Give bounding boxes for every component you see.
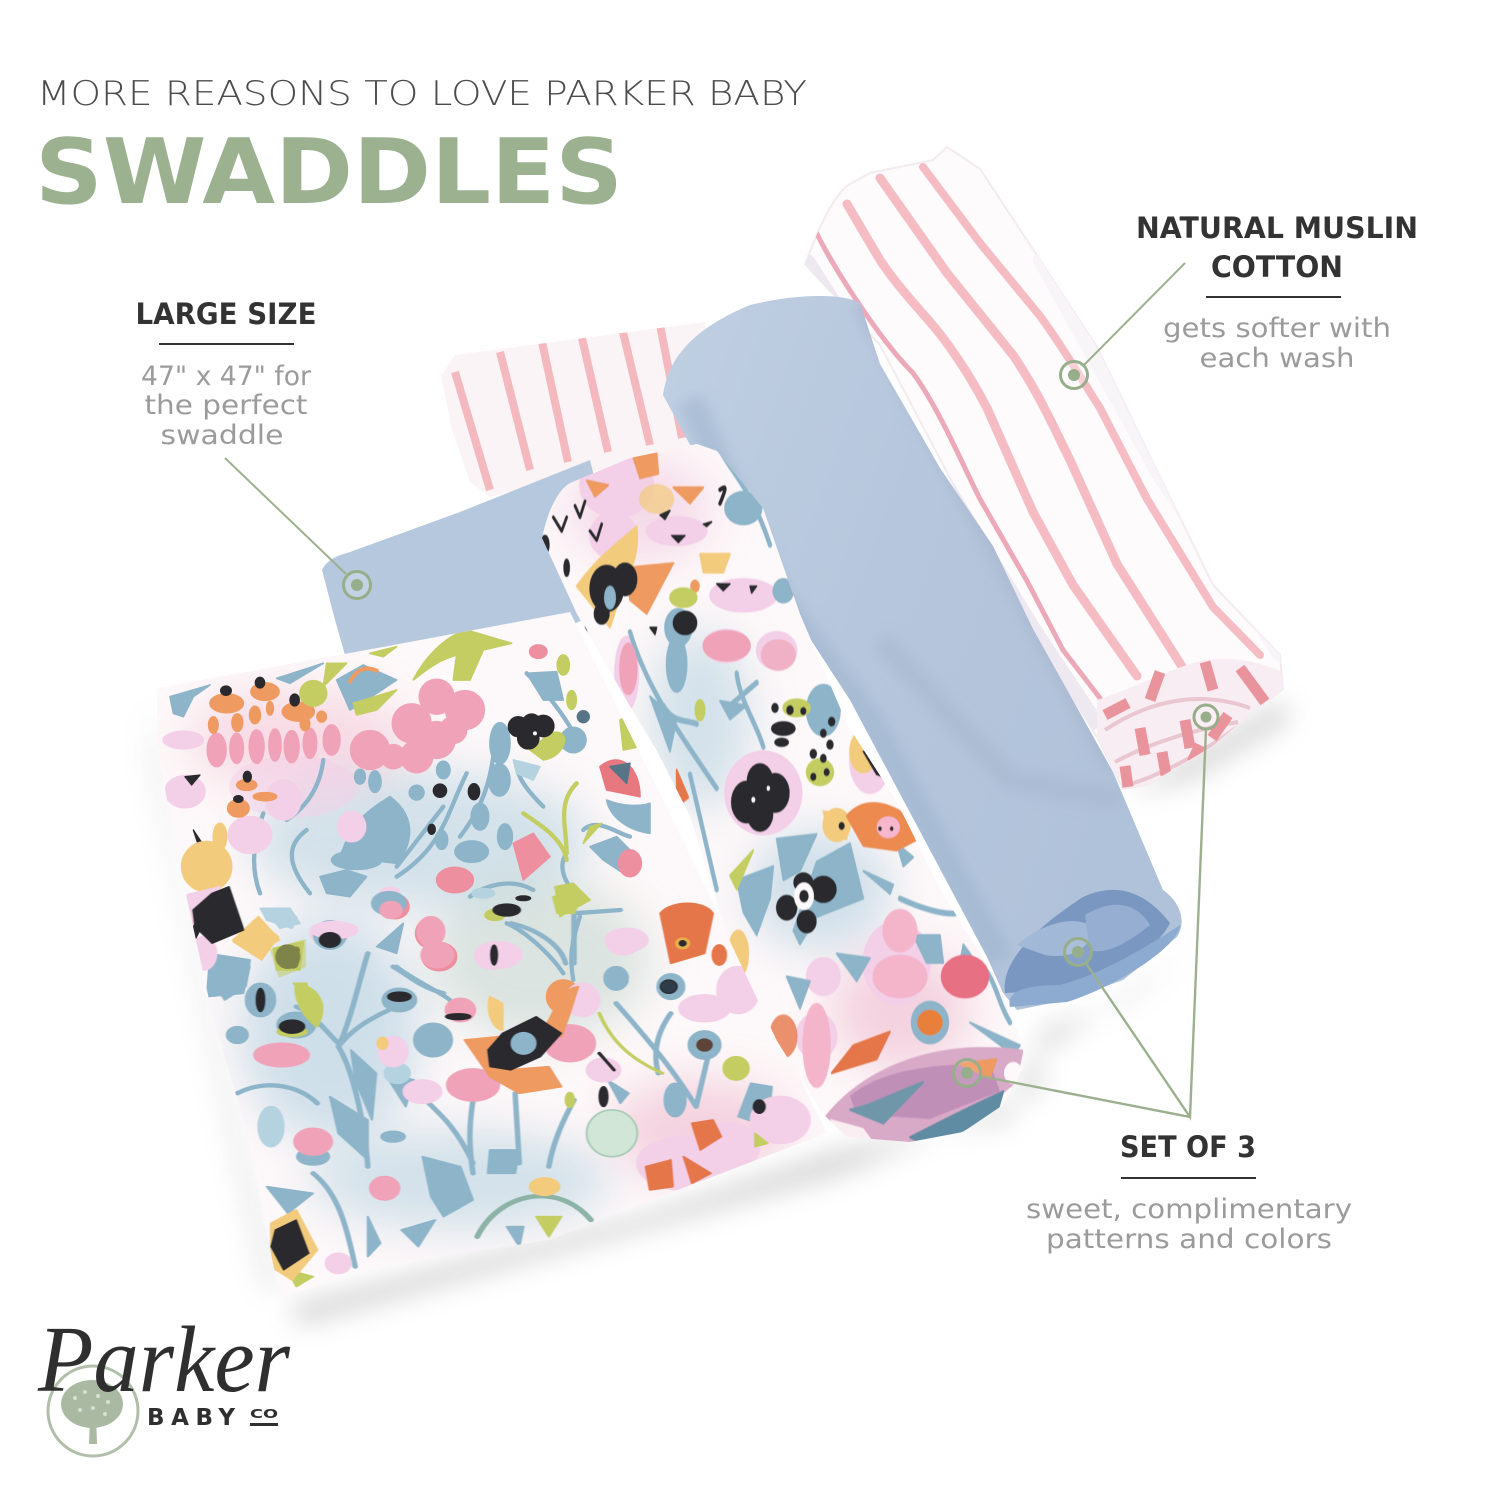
floral roll xyxy=(541,444,1023,1165)
callout heading: SET OF 3 xyxy=(1120,1130,1256,1164)
floral print upper xyxy=(163,630,650,1013)
callout text: swaddle xyxy=(160,420,284,451)
logo co xyxy=(250,1407,278,1426)
callout text: gets softer with xyxy=(1163,313,1391,344)
callout text: sweet, complimentary xyxy=(1026,1194,1352,1225)
callout text: the perfect xyxy=(144,390,308,421)
callout: set of 3 xyxy=(954,705,1352,1255)
rolled end xyxy=(1097,659,1283,800)
shadows xyxy=(148,700,1290,1325)
callout heading: COTTON xyxy=(1211,250,1343,284)
logo xyxy=(37,1308,290,1456)
callout text: each wash xyxy=(1200,343,1354,374)
blue roll xyxy=(663,296,1182,1010)
leader lines xyxy=(980,729,1206,1117)
logo: BABY xyxy=(147,1405,235,1431)
blue flat swaddle xyxy=(322,460,625,655)
leader line xyxy=(1084,263,1185,365)
heading: title: SWADDLES xyxy=(35,120,623,225)
callout heading: NATURAL MUSLIN xyxy=(1136,211,1418,245)
rolled end xyxy=(1005,890,1180,1007)
callout heading: LARGE SIZE xyxy=(136,297,316,331)
callout: large size xyxy=(136,297,370,598)
callout text xyxy=(141,361,312,451)
marker xyxy=(1060,362,1088,388)
colour wash xyxy=(190,690,790,1230)
callout text: 47" x 47" for xyxy=(141,361,312,392)
floral flat swaddle xyxy=(157,612,827,1297)
callout: natural muslin cotton xyxy=(1060,211,1418,388)
back striped swaddle, flat xyxy=(441,322,720,497)
callout text xyxy=(1163,313,1391,374)
leader line xyxy=(225,458,346,574)
logo emblem: tree xyxy=(48,1366,138,1456)
striped roll xyxy=(805,147,1283,800)
marker xyxy=(344,572,370,598)
callout heading xyxy=(1136,211,1418,284)
logo wordmark: Parker xyxy=(37,1308,290,1412)
logo co: CO xyxy=(250,1407,278,1421)
product photo: swaddles xyxy=(148,147,1290,1325)
heading: subtitle: MORE REASONS TO LOVE PARKER BABY xyxy=(37,74,807,114)
roll print xyxy=(541,444,1023,1165)
markers xyxy=(954,705,1218,1086)
roll colour wash xyxy=(570,460,970,1070)
callout text: patterns and colors xyxy=(1046,1224,1332,1255)
callout text xyxy=(1026,1194,1352,1255)
rolled end xyxy=(825,1046,1023,1142)
floral print lower xyxy=(191,887,822,1293)
